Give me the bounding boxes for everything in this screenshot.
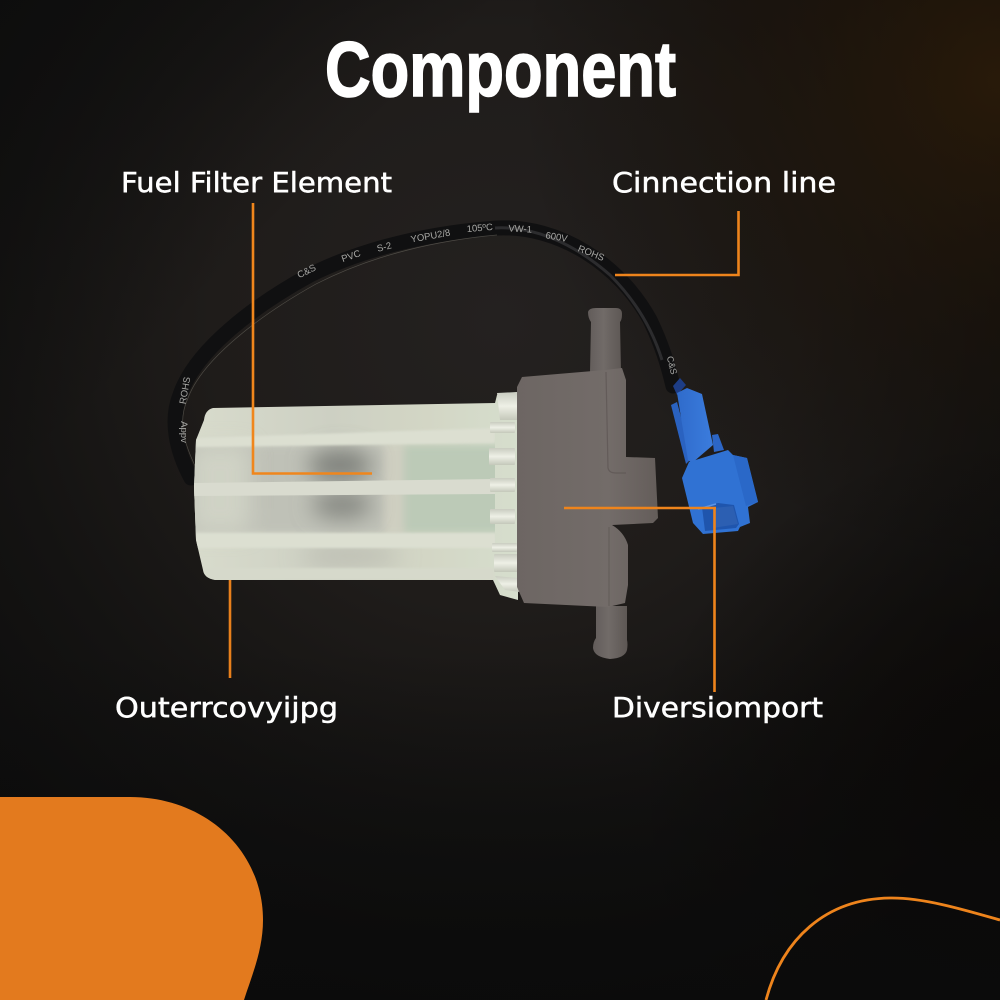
cable print: S-2 bbox=[376, 240, 393, 255]
leader line: fuel filter element bbox=[253, 203, 372, 474]
label: fuel filter element: Fuel Filter Element bbox=[121, 166, 392, 199]
translucent filter body bbox=[190, 392, 520, 600]
housing shell bbox=[517, 368, 658, 607]
ribs bbox=[196, 430, 494, 447]
decorative orange curve bbox=[766, 898, 1000, 1000]
bottom port bbox=[593, 606, 628, 659]
cable print: 600V bbox=[545, 230, 569, 245]
cable print: YOPU2/8 bbox=[410, 228, 451, 245]
cable print: PVC bbox=[340, 248, 362, 265]
cable print: VW-1 bbox=[508, 223, 532, 236]
cable bbox=[175, 222, 679, 478]
cable print: Appv bbox=[178, 421, 189, 443]
decorative orange blob bbox=[0, 797, 263, 1000]
cable print bbox=[178, 222, 679, 443]
cable print: C&S bbox=[665, 355, 679, 375]
cable print: ROHS bbox=[576, 243, 606, 264]
label: diversion port: Diversiomport bbox=[612, 691, 823, 724]
cable print: 105ºC bbox=[466, 222, 493, 235]
label: connection line: Cinnection line bbox=[612, 166, 836, 199]
top port bbox=[588, 308, 622, 372]
title: Component bbox=[325, 25, 676, 113]
grey housing with ports bbox=[517, 308, 658, 659]
leader line: outer cover bbox=[229, 580, 231, 678]
product: fuel filter component bbox=[175, 222, 758, 659]
cable print: ROHS bbox=[178, 376, 193, 405]
leader line: connection line bbox=[615, 211, 738, 275]
filter element shadow bbox=[190, 445, 505, 533]
end teeth bbox=[489, 392, 520, 592]
blue connector bbox=[671, 378, 758, 534]
cable print: C&S bbox=[296, 262, 318, 281]
leader line: diversion port bbox=[564, 508, 716, 692]
label: outer cover: Outerrcovyijpg bbox=[115, 691, 338, 724]
